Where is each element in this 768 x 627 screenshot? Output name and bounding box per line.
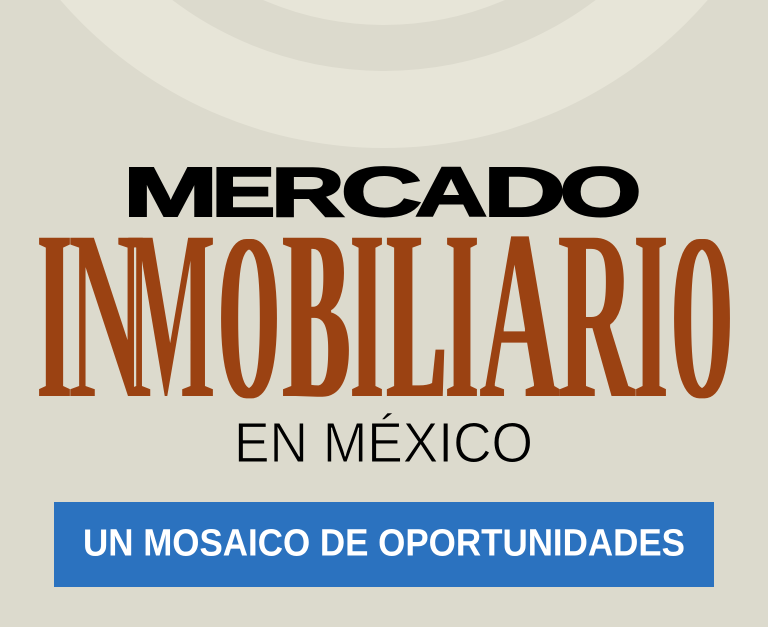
concentric arcs decoration (0, 0, 768, 148)
title: INMOBILIARIO (39, 178, 731, 451)
title: INMOBILIARIO: O (220, 185, 278, 450)
banner background (54, 502, 714, 587)
title: INMOBILIARIO: L (388, 178, 445, 450)
title: MERCADO: A (415, 154, 487, 231)
title: INMOBILIARIO: N (68, 179, 144, 450)
title: INMOBILIARIO: I (39, 181, 70, 451)
title: MERCADO (123, 153, 642, 232)
title: INMOBILIARIO: R (558, 178, 635, 450)
title: INMOBILIARIO: I (352, 180, 382, 451)
title: MERCADO: O (560, 153, 642, 231)
title: INMOBILIARIO: A (480, 180, 560, 451)
title: MERCADO: E (211, 153, 275, 231)
title: MERCADO: M (123, 153, 218, 232)
title: INMOBILIARIO: O (673, 185, 731, 450)
title: INMOBILIARIO: I (636, 180, 666, 451)
title: INMOBILIARIO: I (447, 180, 477, 451)
title: MERCADO: D (483, 153, 566, 231)
title: MERCADO: R (271, 153, 345, 231)
title: INMOBILIARIO: B (284, 180, 349, 451)
banner text: UN MOSAICO DE OPORTUNIDADES (83, 522, 685, 564)
title: MERCADO: C (341, 153, 422, 231)
subtitle: EN MÉXICO: EN MÉXICO (234, 412, 533, 475)
title: INMOBILIARIO: M (127, 181, 216, 451)
banner (54, 502, 714, 587)
